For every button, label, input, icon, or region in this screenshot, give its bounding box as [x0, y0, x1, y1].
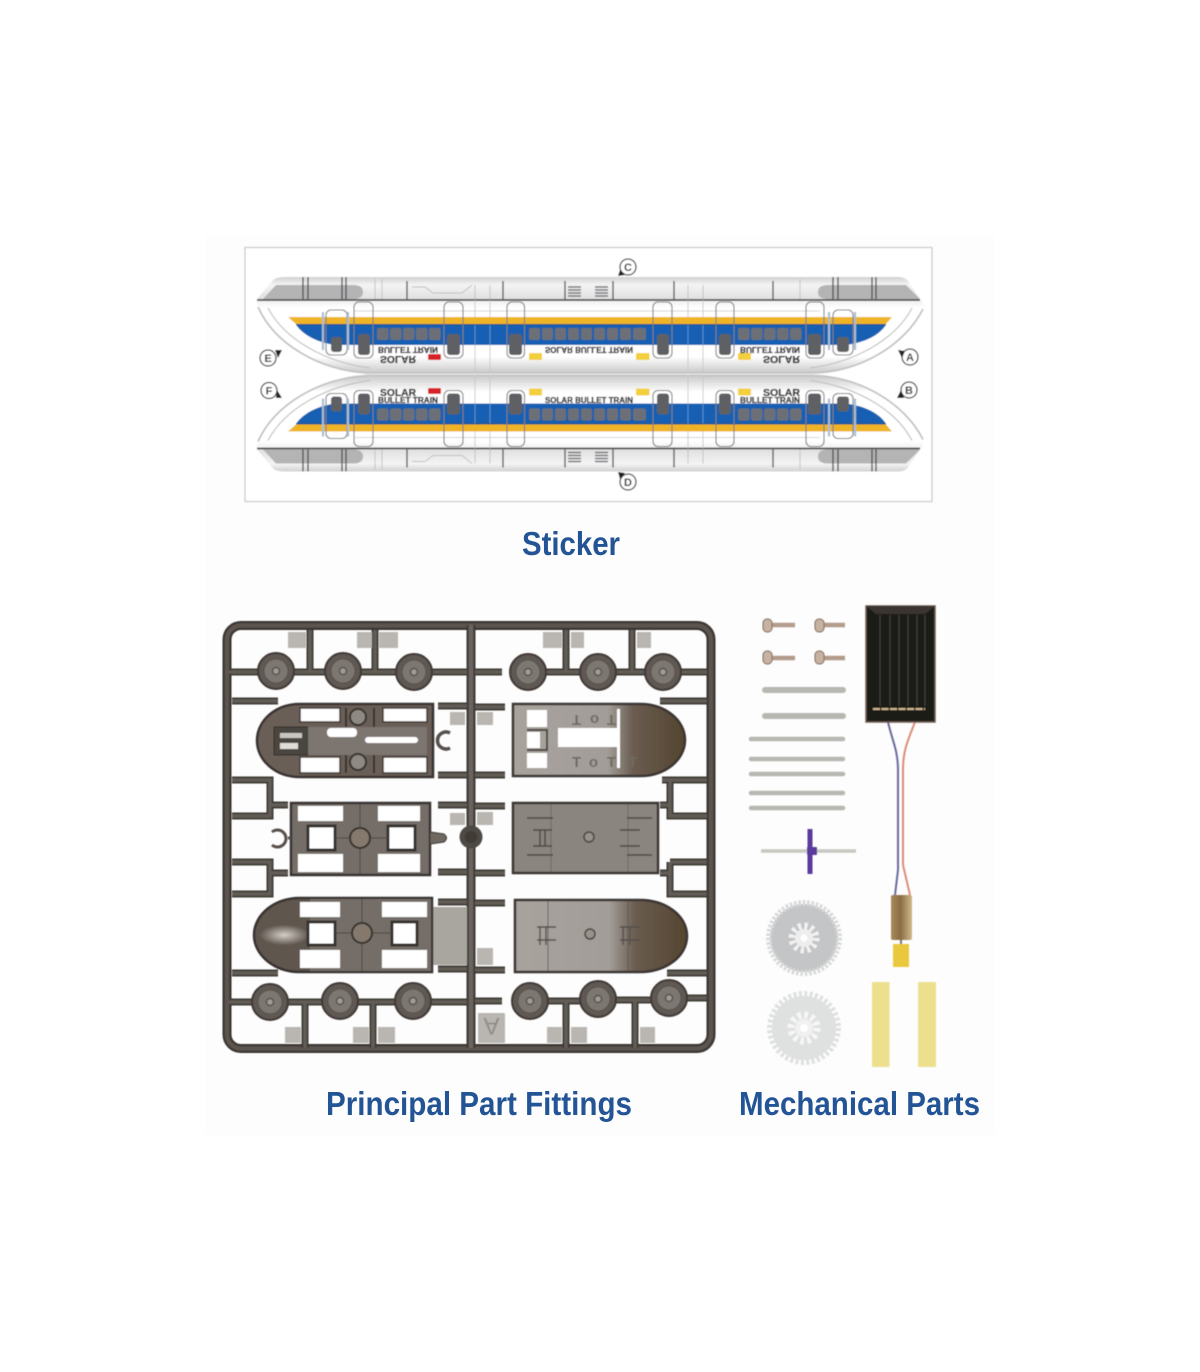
heading: sticker: Sticker — [522, 525, 620, 562]
sprue frame and runners — [227, 625, 711, 1048]
part: left upper chassis — [257, 704, 450, 777]
heading: mechanical parts: Mechanical Parts — [739, 1085, 980, 1122]
assembly markers A to F: A — [906, 352, 914, 364]
panel: principal part fittings sprue — [227, 625, 711, 1048]
part: right upper shell: T — [628, 754, 637, 771]
metal rods — [751, 690, 843, 808]
assembly markers A to F: C — [624, 262, 632, 274]
motor — [891, 895, 912, 967]
gate tabs — [285, 632, 655, 1043]
part: left middle chassis — [272, 803, 446, 875]
lower train sticker: BULLET TRAIN — [740, 396, 800, 405]
axle with purple worm — [761, 829, 856, 874]
part: left lower shell — [254, 898, 467, 972]
gear: coarse toothed — [770, 994, 838, 1062]
lower train sticker: SOLAR BULLET TRAIN — [545, 396, 633, 405]
foam tape strips — [872, 982, 936, 1067]
upper train sticker: SOLAR BULLET TRAIN — [545, 345, 633, 354]
assembly markers A to F: E — [264, 353, 272, 365]
lower train sticker: BULLET TRAIN — [378, 396, 438, 405]
lower train sticker: SOLAR — [763, 388, 801, 399]
assembly markers A to F — [260, 259, 918, 490]
assembly markers A to F: B — [905, 385, 913, 397]
upper train sticker: SOLAR — [380, 353, 417, 364]
lower train sticker: SOLAR — [380, 388, 417, 399]
lower train sticker — [257, 376, 924, 472]
screws — [763, 619, 845, 664]
upper train sticker: SOLAR — [763, 353, 801, 364]
assembly markers A to F: D — [624, 477, 632, 489]
upper train sticker: BULLET TRAIN — [378, 345, 438, 354]
heading: principal part fittings: Principal Part Fittings — [326, 1085, 632, 1122]
upper train sticker: BULLET TRAIN — [740, 345, 800, 354]
part: right lower shell — [515, 900, 687, 972]
part: right middle shell — [513, 803, 658, 873]
background panel — [205, 235, 995, 1135]
panel: mechanical parts — [751, 606, 936, 1067]
solar panel with wires — [866, 606, 935, 895]
gear: fine toothed — [769, 903, 839, 973]
panel: sticker sheet — [245, 248, 932, 502]
upper train sticker — [257, 277, 924, 373]
part: right upper shell: ToT — [572, 711, 616, 728]
wheels — [252, 653, 687, 1020]
part: right upper shell — [513, 704, 685, 776]
tab letter A: A — [483, 1012, 500, 1039]
part: right upper shell: ToT — [572, 754, 616, 771]
assembly markers A to F: F — [266, 386, 273, 398]
